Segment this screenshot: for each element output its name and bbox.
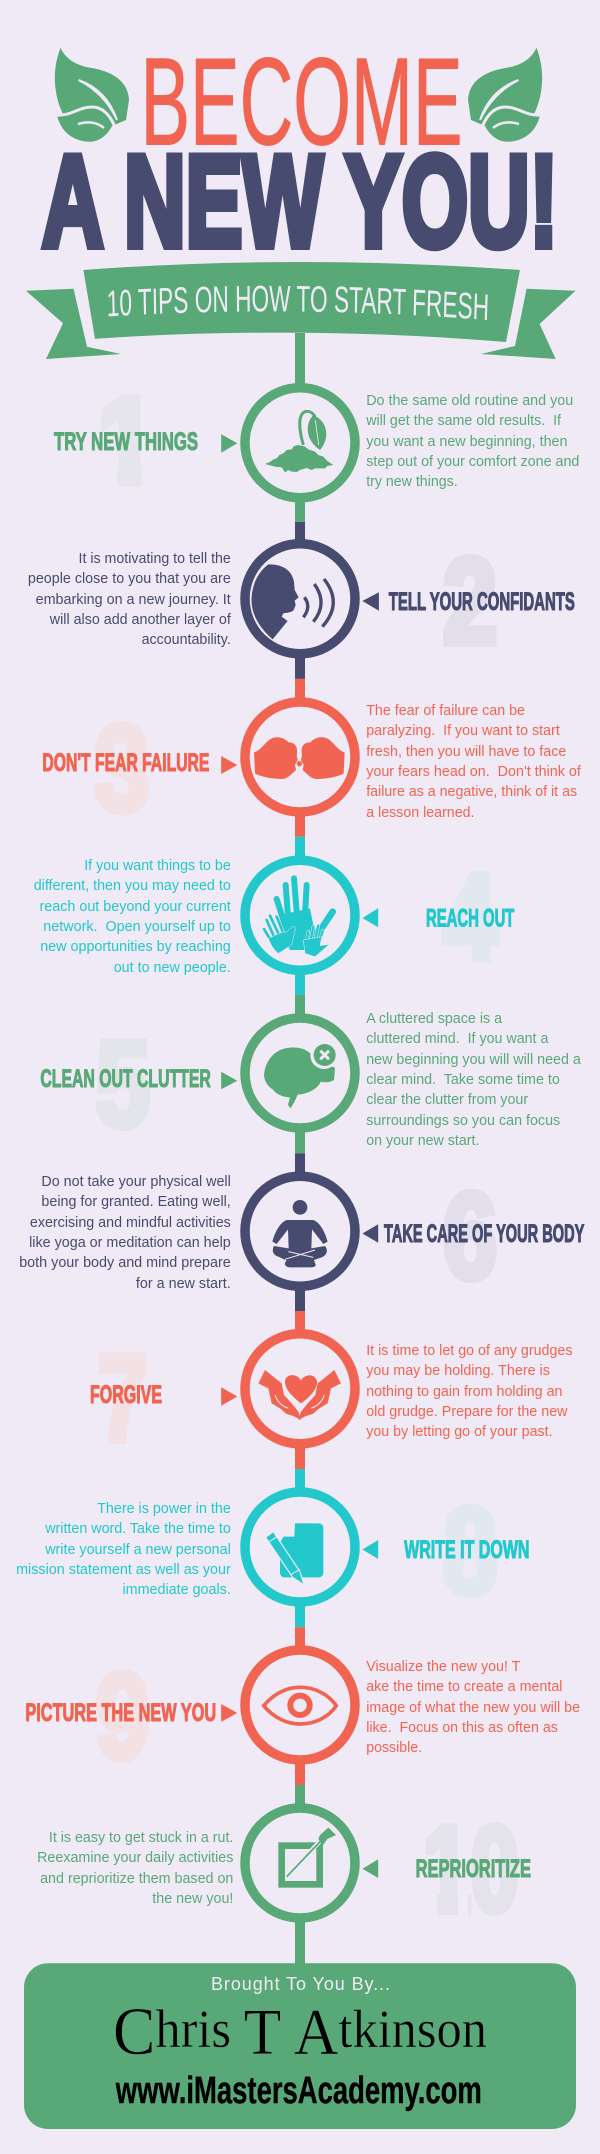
arrow [221, 1387, 237, 1406]
arrow [221, 756, 237, 774]
tip 2: tell your confidants [28, 533, 575, 669]
circle [245, 1650, 355, 1760]
tip 9: picture the new you [25, 1648, 580, 1784]
icon: sprout [265, 411, 333, 472]
banner right tail [481, 289, 576, 359]
banner [26, 262, 576, 359]
icon: speaking head [251, 564, 333, 639]
circle [245, 702, 355, 812]
description [365, 392, 579, 490]
description [37, 1829, 233, 1907]
description: you by letting go of your past. [366, 1423, 553, 1440]
icon: meditation figure [272, 1200, 328, 1267]
description [34, 857, 232, 976]
description: A cluttered space is a [366, 1010, 503, 1027]
description: and reprioritize them based on [40, 1870, 233, 1887]
subtitle [108, 286, 488, 320]
description: new beginning you will will need a [366, 1051, 582, 1068]
description: Do not take your physical well [41, 1173, 231, 1190]
number 10: 10 [423, 1801, 519, 1937]
heading: DON'T FEAR FAILURE [42, 750, 209, 777]
icon: checkbox with arrow [282, 1828, 336, 1884]
arrow [221, 1704, 237, 1722]
circle [245, 1808, 355, 1918]
number 7: 7 [98, 1330, 148, 1466]
arrow [221, 1072, 237, 1089]
icon: hands [264, 878, 333, 957]
icon: right leaf [468, 48, 542, 142]
description: will get the same old results. If [365, 412, 562, 429]
tip 5: clean out clutter [40, 1010, 582, 1152]
description: possible. [366, 1739, 422, 1756]
icon: pencil and paper [266, 1523, 323, 1585]
arrow [362, 1859, 378, 1878]
description: the new you! [152, 1890, 233, 1907]
description: will also add another layer of [49, 611, 232, 628]
circle [245, 1334, 355, 1444]
description: for a new start. [136, 1275, 231, 1292]
footer panel [24, 1963, 576, 2129]
tip 8: write it down [16, 1483, 530, 1619]
description [366, 1342, 572, 1440]
author name: C [113, 1993, 155, 2069]
description: like yoga or meditation can help [29, 1234, 231, 1251]
circle [245, 544, 355, 654]
arrow [362, 592, 379, 611]
heading: CLEAN OUT CLUTTER [40, 1066, 211, 1093]
subtitle: 10 TIPS ON HOW TO START FRESH [108, 286, 488, 320]
heading: FORGIVE [90, 1382, 162, 1409]
description: you may be holding. There is [366, 1362, 550, 1379]
description: clear the clutter from your [366, 1091, 528, 1108]
description [19, 1173, 231, 1292]
number 9: 9 [96, 1648, 150, 1784]
description: surroundings so you can focus [366, 1112, 560, 1129]
description: cluttered mind. If you want a [366, 1030, 549, 1047]
description: written word. Take the time to [44, 1520, 231, 1537]
description: nothing to gain from holding an [366, 1383, 562, 1400]
description: If you want things to be [84, 857, 231, 874]
description: your fears head on. Don't think of [366, 763, 582, 780]
header [42, 34, 558, 274]
footer background [24, 1963, 576, 2129]
description: both your body and mind prepare [19, 1254, 231, 1271]
description: old grudge. Prepare for the new [366, 1403, 568, 1420]
description [28, 550, 232, 648]
circle [245, 1176, 355, 1286]
description: immediate goals. [122, 1581, 231, 1598]
icon: left leaf [55, 48, 129, 142]
author name: hris [155, 1999, 244, 2059]
heading: PICTURE THE NEW YOU [25, 1700, 216, 1727]
icon: hands holding heart [258, 1370, 341, 1420]
description: exercising and mindful activities [30, 1214, 231, 1231]
author name: tkinson [338, 1999, 487, 2059]
description: ake the time to create a mental [366, 1678, 562, 1695]
description: It is time to let go of any grudges [366, 1342, 572, 1359]
banner body [83, 262, 520, 342]
description: There is power in the [97, 1500, 231, 1517]
banner left tail [26, 289, 121, 359]
icon: brain [264, 1042, 338, 1108]
tip 6: take care of your body [19, 1168, 584, 1304]
description: mission statement as well as your [16, 1561, 231, 1578]
circle [245, 1018, 355, 1128]
number 4: 4 [443, 849, 497, 985]
heading: REPRIORITIZE [416, 1856, 531, 1883]
description: paralyzing. If you want to start [366, 722, 561, 739]
arrow [221, 434, 237, 453]
icon: boxing gloves [254, 737, 345, 779]
tip 3: don't fear failure [42, 700, 582, 836]
number 5: 5 [96, 1016, 150, 1152]
description: like. Focus on this as often as [366, 1719, 558, 1736]
description: The fear of failure can be [366, 702, 525, 719]
description: a lesson learned. [366, 804, 474, 821]
arrow [362, 1224, 378, 1243]
description: being for granted. Eating well, [41, 1193, 231, 1210]
description: write yourself a new personal [44, 1541, 231, 1558]
tip 10: reprioritize [38, 1804, 531, 1922]
circle [245, 860, 355, 970]
number 2: 2 [443, 533, 497, 669]
description: clear mind. Take some time to [366, 1071, 560, 1088]
description: out to new people. [114, 959, 231, 976]
tip 7: forgive [90, 1330, 572, 1466]
description: try new things. [366, 473, 458, 490]
number 1: 1 [97, 373, 157, 509]
description: accountability. [142, 631, 231, 648]
description: people close to you that you are [28, 570, 231, 587]
heading: REACH OUT [426, 906, 514, 932]
description: different, then you may need to [34, 877, 231, 894]
description [366, 1658, 580, 1756]
icon: eye [264, 1687, 336, 1724]
heading: TRY NEW THINGS [54, 429, 198, 456]
description: image of what the new you will be [366, 1699, 580, 1716]
circle [245, 1492, 355, 1602]
description: It is easy to get stuck in a rut. [49, 1829, 233, 1846]
number 6: 6 [443, 1168, 497, 1304]
description: It is motivating to tell the [78, 550, 231, 567]
tip 1: try new things [54, 383, 578, 502]
timeline spine [295, 333, 305, 1965]
arrow [362, 908, 378, 927]
author name: T [244, 1996, 281, 2069]
description: Reexamine your daily activities [37, 1849, 233, 1866]
description: reach out beyond your current [40, 898, 232, 915]
description: network. Open yourself up to [43, 918, 231, 935]
author name: A [294, 1996, 339, 2069]
description: fresh, then you will have to face [366, 743, 566, 760]
description: step out of your comfort zone and [366, 453, 579, 470]
circle [245, 388, 355, 498]
description: you want a new beginning, then [366, 433, 568, 450]
description: embarking on a new journey. It [36, 591, 232, 608]
heading: WRITE IT DOWN [404, 1537, 530, 1564]
description: failure as a negative, think of it as [366, 783, 577, 800]
description: new opportunities by reaching [40, 938, 231, 955]
brought to you by: Brought To You By... [211, 1974, 390, 1994]
description: on your new start. [366, 1132, 480, 1149]
description: Do the same old routine and you [366, 392, 573, 409]
number 3: 3 [95, 700, 149, 836]
description [16, 1500, 231, 1598]
description [366, 702, 582, 821]
description [366, 1010, 582, 1149]
number 8: 8 [443, 1483, 497, 1619]
arrow [362, 1540, 378, 1559]
description: Visualize the new you! T [366, 1658, 520, 1675]
tip 4: reach out [34, 849, 514, 985]
